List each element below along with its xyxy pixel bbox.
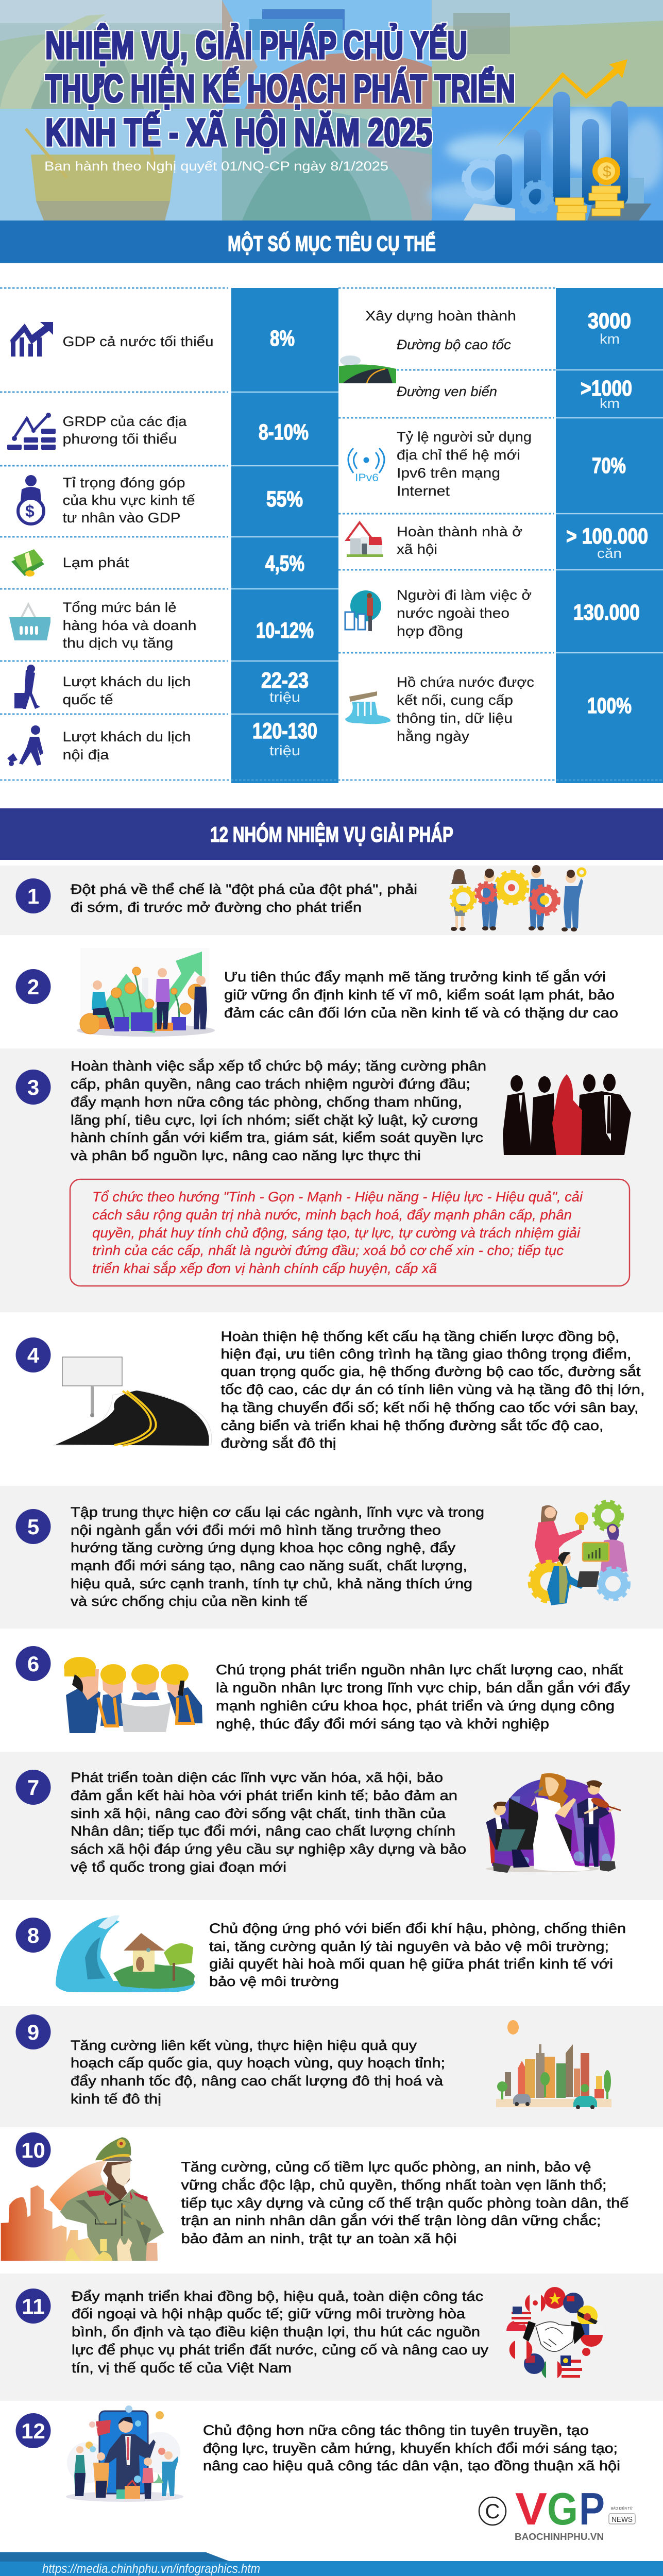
icon: line chart with bricks — [7, 413, 56, 450]
icon: person with dollar coin — [18, 475, 44, 524]
row: road construction: Đường ven biển — [397, 384, 497, 399]
row: private sector share: tư nhân vào GDP — [63, 510, 180, 526]
text: giải quyết hài hoà mối quan hệ giữa phát triển kinh tế với — [209, 1956, 613, 1972]
text: Chủ động ứng phó với biến đổi khí hậu, phòng, chống thiên — [209, 1921, 626, 1936]
text: Hoàn thiện hệ thống kết cấu hạ tầng chiến lược đồng bộ, — [220, 1329, 619, 1344]
illustration: business silhouettes — [503, 1074, 631, 1155]
panel: task 1 — [15, 865, 585, 931]
illustration: team, gears, idea — [530, 1501, 629, 1605]
illustration: billboard and road — [53, 1357, 212, 1446]
panel: task 11 — [15, 2287, 603, 2380]
row: reservoirs: hằng ngày — [397, 728, 470, 744]
text: lãng phí, tiêu cực, lợi ích nhóm; siết chặt kỷ luật, kỷ cương — [71, 1112, 478, 1128]
text: mạnh đổi mới sáng tạo, nâng cao năng suất, chất lượng, — [71, 1558, 467, 1573]
number 8 — [15, 1918, 50, 1953]
text: Nhân dân; tiếp tục đổi mới, nâng cao chất lượng chính — [71, 1823, 455, 1839]
text: Đẩy mạnh triển khai đồng bộ, hiệu quả, toàn diện công tác — [72, 2289, 483, 2304]
icon: growth chart — [10, 322, 53, 357]
text: Tăng cường liên kết vùng, thực hiện hiệu quả quy — [71, 2038, 417, 2053]
illustration: money trees and rising arrow — [77, 948, 215, 1037]
icon: dam with water — [345, 691, 390, 724]
text: bình, ổn định và tạo điều kiện thuận lợi, thu hút các nguồn — [72, 2324, 480, 2340]
text: và phân bổ nguồn lực, nâng cao năng lực thực thi — [71, 1148, 421, 1163]
row: GDP: 8% — [270, 326, 295, 351]
row: retail: Tổng mức bán lẻ — [63, 600, 176, 615]
text: giữ vững ổn định kinh tế vĩ mô, kiểm soát lạm phát, bảo — [224, 987, 615, 1003]
number 3 — [15, 1070, 50, 1105]
number 7 — [15, 1770, 50, 1805]
text: lực để phục vụ phát triển đất nước, củng cố và nâng cao uy — [72, 2342, 489, 2358]
text: tai, tăng cường quản lý tài nguyên và bảo vệ môi trường; — [209, 1939, 609, 1954]
text — [216, 1662, 631, 1732]
number 2 — [15, 969, 50, 1004]
icon: person with dollar coin: $ — [25, 502, 35, 520]
text — [220, 1329, 645, 1451]
callout: organisational direction: Tổ chức theo hướng "Tinh - Gọn - Mạnh - Hiệu năng - Hiệu lực - Hiệu quả", cải — [92, 1189, 583, 1205]
row: social housing — [347, 522, 648, 561]
panel: task 2 — [15, 948, 618, 1037]
number 10 — [15, 2132, 50, 2167]
panel: task 3 — [15, 1058, 631, 1286]
row: GRDP: 8-10% — [259, 420, 309, 445]
row: IPv6 — [348, 429, 626, 499]
illustration: people with gears — [451, 865, 585, 931]
heading band: một số mục tiêu cụ thể: MỘT SỐ MỤC TIÊU CỤ THỂ — [228, 231, 436, 256]
row: road construction: >1000 — [581, 376, 632, 401]
text: quan trọng quốc gia, hệ thống đường bộ cao tốc, đường sắt — [220, 1363, 641, 1379]
number 6 — [15, 1646, 50, 1681]
panel: task 7 — [15, 1770, 621, 1875]
text — [209, 1921, 626, 1989]
illustration: musicians on stage — [486, 1773, 621, 1873]
row: social housing: Hoàn thành nhà ở — [397, 524, 522, 539]
row: GDP — [10, 322, 295, 357]
number 4 — [15, 1337, 50, 1372]
text: hoạch cấp quốc gia, quy hoạch vùng, quy hoạch tỉnh; — [71, 2055, 445, 2071]
icon: traveller with suitcase — [14, 665, 40, 709]
icon: banknotes and coins — [11, 549, 44, 577]
row: reservoirs: thông tin, dữ liệu — [397, 710, 513, 726]
text — [203, 2422, 620, 2473]
row: reservoirs: 100% — [587, 693, 632, 718]
text: đảm gắn kết hài hòa với phát triển kinh tế; bảo đảm an — [71, 1787, 457, 1803]
chart icon: rising bars, gears, coins — [463, 59, 628, 221]
text: đi sớm, đi trước mở đường cho phát triển — [71, 900, 362, 915]
illustration: city with cars — [496, 2000, 611, 2109]
icon: walking traveller — [7, 725, 43, 766]
text: đường sắt đô thị — [220, 1435, 336, 1451]
text: Chủ động hơn nữa công tác thông tin tuyên truyền, tạo — [203, 2422, 589, 2438]
text: Ưu tiên thúc đẩy mạnh mẽ tăng trưởng kinh tế gắn với — [224, 969, 606, 985]
illustration: flags and handshake — [506, 2287, 603, 2380]
illustration: engineers with helmets — [64, 1657, 202, 1733]
row: reservoirs: Hồ chứa nước được — [397, 674, 534, 690]
row: private sector share — [18, 475, 303, 526]
icon: shopping basket — [9, 604, 50, 640]
heading band: 12 nhóm nhiệm vụ giải pháp — [0, 808, 663, 860]
panel: task 9 — [15, 2000, 611, 2109]
number 5 — [15, 1509, 50, 1544]
row: overseas workers: Người đi làm việc ở — [397, 587, 532, 603]
row: retail — [9, 600, 314, 651]
text — [71, 1058, 486, 1163]
callout: organisational direction: triển khai sắp xếp đơn vị hành chính cấp huyện, cấp xã — [92, 1260, 437, 1276]
panel: task 5 — [15, 1501, 629, 1609]
logo: VGP news — [479, 2483, 635, 2542]
panel: task 8 — [15, 1916, 626, 1992]
text: bảo đảm an ninh, trật tự an toàn xã hội — [181, 2231, 456, 2246]
row: retail: thu dịch vụ tăng — [63, 635, 173, 651]
row: retail: hàng hóa và doanh — [63, 618, 197, 633]
row: GRDP: phương tối thiểu — [63, 431, 177, 447]
row: inflation: 4,5% — [265, 551, 304, 576]
logo: VGP news: NEWS — [611, 2515, 633, 2524]
text: trận an ninh nhân dân gắn với thế trận lòng dân vững chắc; — [181, 2212, 601, 2228]
title: KINH TẾ - XÃ HỘI NĂM 2025 — [45, 111, 432, 155]
row: international visitors: Lượt khách du lịch — [63, 674, 191, 689]
row: IPv6: Ipv6 trên mạng — [397, 465, 500, 481]
row: GRDP: GRDP của các địa — [63, 414, 188, 429]
row: overseas workers — [345, 587, 640, 639]
callout: organisational direction — [70, 1179, 630, 1286]
icon: IPv6 signal — [348, 448, 384, 484]
text: sinh xã hội, nâng cao đời sống vật chất, tinh thần của — [71, 1806, 446, 1821]
logo: VGP news: BÁO ĐIỆN TỬ — [611, 2506, 633, 2511]
callout: organisational direction: trình của các cấp, nhất là người đứng đầu; xoá bỏ cơ chế xin - cho; tiếp tục — [92, 1243, 564, 1258]
text: sách xã hội đáp ứng yêu cầu sự nghiệp xây dựng và bảo — [71, 1841, 466, 1857]
number 1: 1 — [27, 884, 39, 908]
row: domestic visitors: 120-130 — [252, 719, 317, 743]
row backgrounds — [0, 866, 663, 2401]
text: vệ tổ quốc trong giai đoạn mới — [71, 1859, 286, 1875]
row: social housing: > 100.000 — [566, 524, 648, 549]
row: domestic visitors: Lượt khách du lịch — [63, 729, 191, 744]
logo: VGP news: G — [547, 2483, 578, 2534]
number 3: 3 — [27, 1075, 39, 1099]
illustration: wave hitting house — [56, 1916, 195, 1992]
row: road construction: km — [600, 396, 620, 411]
text: đối ngoại và hội nhập quốc tế; giữ vững môi trường hòa — [72, 2306, 466, 2321]
row: private sector share: Tỉ trọng đóng góp — [63, 475, 185, 490]
text: động lực, truyền cảm hứng, khuyến khích đổi mới sáng tạo; — [203, 2441, 618, 2456]
row: social housing: xã hội — [397, 541, 437, 557]
text — [224, 969, 618, 1021]
row: road construction: Đường bộ cao tốc — [397, 337, 512, 352]
logo: VGP news: P — [579, 2483, 605, 2534]
panel: task 4 — [15, 1329, 645, 1451]
text — [71, 2038, 445, 2107]
text: hướng tăng cường ứng dụng khoa học công nghệ, đẩy — [71, 1540, 456, 1555]
icon: IPv6 signal: IPv6 — [355, 472, 379, 484]
logo: VGP news: V — [515, 2483, 547, 2534]
row: social housing: căn — [597, 546, 622, 561]
number 5: 5 — [27, 1515, 39, 1539]
logo: VGP news: BAOCHINHPHU.VN — [515, 2532, 604, 2542]
number 7: 7 — [27, 1775, 39, 1800]
text: nội ngành gắn với đổi mới mô hình tăng trưởng theo — [71, 1522, 441, 1538]
text: đẩy nhanh tốc độ, nâng cao chất lượng đô thị hoá và — [71, 2073, 444, 2089]
text: là nguồn nhân lực trong lĩnh vực chip, bán dẫn gắn với đẩy — [216, 1680, 631, 1696]
text: cấp, phân quyền, nâng cao trách nhiệm người đứng đầu; — [71, 1076, 470, 1092]
row: IPv6: địa chỉ thế hệ mới — [397, 447, 520, 463]
row: international visitors: quốc tế — [63, 692, 113, 707]
text: đảm các cân đối lớn của nền kinh tế và có thặng dư cao — [224, 1005, 618, 1021]
number 12 — [15, 2413, 50, 2448]
title: NHIỆM VỤ, GIẢI PHÁP CHỦ YẾU — [45, 23, 467, 67]
callout: organisational direction: cách sâu rộng quản trị nhà nước, minh bạch hoá, đẩy mạnh phân cấp, phân — [92, 1207, 572, 1223]
text: tiếp tục xây dựng và củng cố thế trận quốc phòng toàn dân, thế — [181, 2195, 628, 2211]
number 12: 12 — [21, 2419, 45, 2443]
heading band: một số mục tiêu cụ thể — [0, 221, 663, 263]
number 2: 2 — [27, 975, 39, 999]
text: nâng cao hiệu quả công tác dân vận, tạo đồng thuận xã hội — [203, 2458, 620, 2473]
illustration: influencer with phone and megaphone — [66, 2405, 183, 2502]
text: và sức chống chịu của nền kinh tế — [71, 1594, 308, 1609]
row: domestic visitors: nội địa — [63, 747, 110, 762]
row: road construction: Xây dựng hoàn thành — [365, 308, 516, 324]
text — [72, 2289, 489, 2376]
number 9: 9 — [27, 2020, 39, 2044]
row: inflation — [11, 549, 304, 577]
row: road construction: 3000 — [588, 309, 631, 333]
text — [71, 1770, 466, 1875]
number 11 — [15, 2289, 50, 2324]
text: Hoàn thành việc sắp xếp tổ chức bộ máy; tăng cường phân — [71, 1058, 486, 1074]
row: domestic visitors: triệu — [269, 743, 300, 758]
text: kinh tế đô thị — [71, 2091, 161, 2107]
number 1 — [15, 878, 50, 913]
text — [71, 1504, 484, 1609]
row: IPv6: 70% — [592, 453, 626, 478]
icon: worker at airport — [345, 590, 381, 631]
row: private sector share: 55% — [266, 487, 303, 512]
row: overseas workers: nước ngoài theo — [397, 605, 509, 621]
text: Tăng cường, củng cố tiềm lực quốc phòng, an ninh, bảo vệ — [181, 2159, 591, 2175]
text — [71, 882, 417, 915]
text: hiện đại, ưu tiên công trình hạ tầng giao thông trọng điểm, — [220, 1346, 632, 1362]
logo: VGP news: C — [485, 2500, 500, 2523]
text: vững chắc độc lập, chủ quyền, thống nhất toàn vẹn lãnh thổ; — [181, 2177, 607, 2193]
row: road construction — [339, 308, 632, 411]
text: mạnh nghiên cứu khoa học, phát triển và ứng dụng công — [216, 1698, 615, 1714]
footer band with URL: https://media.chinhphu.vn/infographics.htm — [42, 2562, 260, 2576]
panel: task 10 — [1, 2132, 628, 2261]
text: tín, vị thế quốc tế của Việt Nam — [72, 2360, 292, 2376]
number 11: 11 — [22, 2294, 45, 2318]
row: reservoirs: kết nối, cung cấp — [397, 692, 513, 708]
panel: task 6 — [15, 1646, 631, 1733]
row: retail: 10-12% — [256, 618, 314, 643]
chart icon: rising bars, gears, coins: $ — [603, 163, 611, 180]
row: international visitors: 22-23 — [261, 668, 309, 693]
text: Tập trung thực hiện cơ cấu lại các ngành, lĩnh vực và trong — [71, 1504, 484, 1520]
row: IPv6: Internet — [397, 483, 450, 499]
number 4: 4 — [27, 1343, 40, 1367]
row: international visitors: triệu — [269, 689, 300, 705]
number 6: 6 — [27, 1652, 39, 1676]
panel: left targets table — [0, 288, 338, 783]
text: Đột phá về thể chế là "đột phá của đột phá", phải — [71, 882, 417, 897]
text: đẩy mạnh hơn nữa công tác phòng, chống tham nhũng, — [71, 1094, 462, 1110]
row: overseas workers: 130.000 — [573, 600, 640, 625]
text: Phát triển toàn diện các lĩnh vực văn hóa, xã hội, bảo — [71, 1770, 443, 1785]
row: IPv6: Tỷ lệ người sử dụng — [397, 429, 532, 445]
number 9 — [15, 2014, 50, 2049]
text: hành chính gắn với kiểm tra, giám sát, kiểm soát quyền lực — [71, 1129, 483, 1145]
number 10: 10 — [21, 2138, 45, 2162]
row: private sector share: của khu vực kinh tế — [63, 493, 195, 508]
text: cảng biển và triển khai hệ thống đường sắt tốc độ cao, — [220, 1417, 604, 1433]
icon: road in green hills — [339, 355, 396, 383]
title — [45, 23, 515, 155]
panel: task 12 — [15, 2405, 620, 2502]
row: inflation: Lạm phát — [63, 555, 129, 570]
illustration: saluting officer and city — [1, 2137, 164, 2261]
subtitle: Ban hành theo Nghị quyết 01/NQ-CP ngày 8/1/2025 — [44, 159, 388, 174]
text: bảo vệ môi trường — [209, 1974, 339, 1989]
number 8: 8 — [27, 1923, 39, 1947]
text: hiệu quả, sức cạnh tranh, tính tự chủ, khả năng thích ứng — [71, 1576, 472, 1591]
row: overseas workers: hợp đồng — [397, 623, 463, 639]
text: nghệ, thúc đẩy đổi mới sáng tạo và khởi nghiệp — [216, 1716, 549, 1732]
text — [181, 2159, 628, 2246]
panel: banner photo collage — [0, 0, 663, 221]
text: hạ tầng chuyển đổi số; kết nối hệ thống cao tốc với sân bay, — [220, 1400, 639, 1415]
panel: right targets table — [338, 288, 663, 783]
row: road construction: km — [600, 331, 620, 347]
row: GDP: GDP cả nước tối thiểu — [63, 334, 213, 349]
text: Chú trọng phát triển nguồn nhân lực chất lượng cao, nhất — [216, 1662, 623, 1677]
callout: organisational direction: quyền, phát huy tính chủ động, sáng tạo, tự lực, tự cường và trách nhiệm giải — [92, 1225, 581, 1241]
icon: house and apartments — [347, 522, 383, 557]
row: domestic visitors — [7, 719, 317, 766]
row: international visitors — [14, 665, 309, 709]
text: tốc độ cao, các dự án có tính liên vùng và hạ tầng đô thị lớn, — [220, 1382, 645, 1397]
row: GRDP — [7, 413, 309, 450]
footer band with URL — [0, 2552, 663, 2576]
heading band: 12 nhóm nhiệm vụ giải pháp: 12 NHÓM NHIỆM VỤ GIẢI PHÁP — [210, 822, 453, 846]
row: reservoirs — [345, 674, 632, 744]
